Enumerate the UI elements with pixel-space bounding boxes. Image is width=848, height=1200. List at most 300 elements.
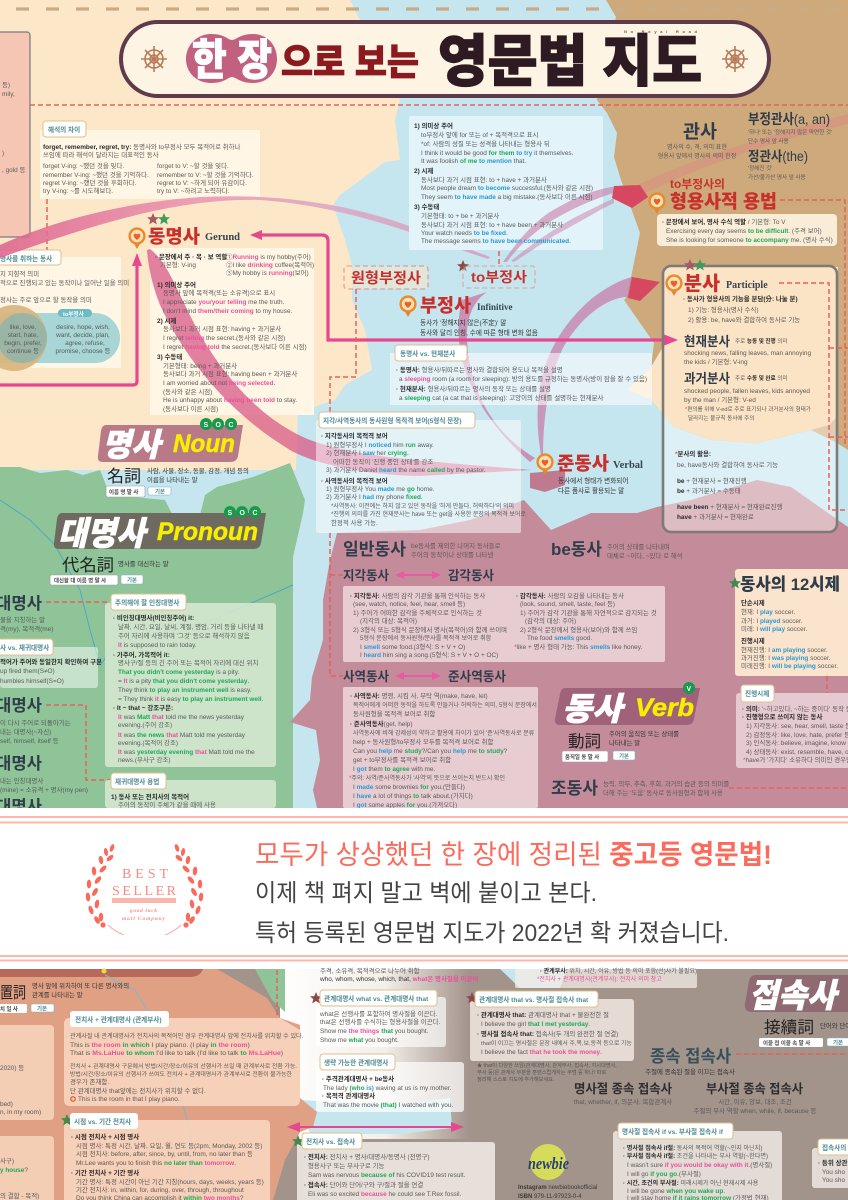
- section: 명사 Noun: Noun: [173, 430, 235, 458]
- panel: 동명사 vs 현재분사: · 동명사: 형용사/뒤따르는 명사와 결합되어 용도나 목적을 설명: [396, 365, 563, 374]
- panel: 지각/사역동사 목적격 보어: 1) 원형부정사 You made me go home.: [326, 484, 435, 493]
- panel: 명사절 접속사 if vs 부사절 접속사 if: I will be gone when you wake up.: [627, 1188, 725, 1195]
- panel: 관계대명사 that vs 명사절 접속사 that: [466, 991, 634, 1061]
- section: 명사 Noun: 이름을 나타내는 말: [147, 475, 198, 484]
- promo line 3: 특허 등록된 영문법 지도가 2022년 확 커졌습니다.: [255, 920, 729, 947]
- arcs: to부정사 to 형용사적 용법: [503, 114, 848, 262]
- section: 동사 Verb: 동사: [562, 691, 626, 727]
- panel: 분사 Participle: be, have동사와 결합하여 동사로 기능: [677, 460, 778, 469]
- section: to부정사의 형용사적 용법: 형용사적 용법: [670, 191, 777, 212]
- panel: 지각동사 감각동사: I heard him sing a song.(5형식: S + V + O + OC): [360, 650, 498, 659]
- tag: 기본: 기본: [833, 1038, 843, 1046]
- panel: 지각/사역동사 목적격 보어: 한정적 사용 가능.: [331, 518, 378, 527]
- panel: 분사 Participle: 주로 수동 및 완료 의미: [735, 374, 788, 382]
- panel: 지각동사 감각동사: · 지각동사: 사람의 감각 기관을 통해 인식하는 동사: [350, 591, 485, 600]
- section: 준동사 Verbal: 다른 품사로 활용되는 말: [558, 486, 624, 495]
- arc: 동명사 to 준동사 sweep: [147, 249, 530, 476]
- map background: lower section: [0, 968, 848, 1200]
- panel: 주의해야 할 인칭대명사: news.(부사구 강조): [118, 755, 171, 764]
- panel: to부정사 text: 동사보다 과거 시점 표현: to + have + 과거분사: [421, 175, 547, 184]
- badge: V: V: [686, 686, 692, 693]
- panel: 관계대명사 that vs 명사절 접속사 that: I believe the girl that I met yesterday.: [481, 1021, 590, 1028]
- panel: 사역동사: I have a lot of things to talk about.(가지다): [353, 791, 473, 800]
- panel: 동명사를 취하는 동사: 지 지향적 의미: [0, 269, 39, 278]
- heading: 준동사: 준동사: [557, 453, 609, 474]
- panel: 주의해야 할 인칭대명사: [105, 594, 276, 767]
- section: 일반동사: be동사를 제외한 나머지 동사들로: [411, 541, 501, 550]
- panel: 해석의 차이: 해석의 차이: [48, 125, 80, 134]
- text block: 대명사 left column: 적어가 주어와 동일한지 확인하여 구분: [0, 657, 102, 666]
- panel: 지각/사역동사 목적격 보어: *사역동사: 이전에는 하지 않고 있던 동작을 '하게 만들다, 허락하다'의 의미: [331, 502, 514, 510]
- panel: 사역동사: *주의: 사역/준사역동사가 '사역'의 뜻으로 쓰이는지 반드시 확인: [349, 774, 505, 782]
- panel: 동명사를 취하는 동사: 정사는 주로 앞으로 할 동작을 의미: [0, 295, 92, 304]
- tag: 이름 명 말 사: 이름 명 말 사: [109, 488, 138, 496]
- heading: 분사: 분사: [684, 273, 720, 295]
- section: 관사: 단수 명사 앞 사용: [748, 137, 789, 145]
- panels: left lower stubs: bed): [0, 1101, 13, 1108]
- panel: 동사의 12시제: 과거진행: I was playing soccer.: [741, 653, 831, 662]
- panel: top clipped 관계부사: [515, 967, 697, 988]
- panel: 동명사를 취하는 동사: 명사를 취하는 동사: [0, 254, 52, 263]
- section: to부정사의 형용사적 용법: Exercising every day seems to be difficult. (주격 보어): [666, 226, 822, 235]
- badge: best seller wreath: good luck: [129, 908, 157, 914]
- panel: 명사절 접속사 if vs 부사절 접속사 if: I will go if you go.(부사절): [627, 1169, 701, 1178]
- section: 관사: '정해진 것': [748, 164, 772, 172]
- venn diagram: [0, 305, 120, 371]
- panel: 재귀대명사 용법: [105, 773, 276, 809]
- panel: to부정사 text: [414, 121, 593, 245]
- panel: 시점 vs 기간 전치사: Mr.Lee wants you to finish this no later than tomorrow.: [76, 1160, 236, 1167]
- section: 부정사 Infinitive: 동사가 '정해지지 않은(不定)' 말: [420, 318, 506, 327]
- section: 준동사 Verbal: 동사에서 형태가 변화되어: [558, 476, 628, 485]
- panel: 분사 Participle: 1) 기능: 형용사(명사 수식): [688, 305, 758, 314]
- section: 명사 Noun: 사람, 사물, 장소, 동물, 감정, 개념 등의: [147, 466, 249, 475]
- icon: ship wheel left: [141, 46, 167, 72]
- white promo band: [0, 808, 848, 969]
- venn diagram: agree, refuse,: [65, 340, 105, 347]
- panel: 해석의 차이: remember V-ing: ~했던 것을 기억하다.: [43, 170, 149, 179]
- panel: to부정사 text: 기본형태: to + be + 과거분사: [421, 211, 499, 220]
- text block: 대명사 left column: up fired them(S≠O): [0, 668, 55, 675]
- section: 대명사 Pronoun: Pronoun: [157, 518, 258, 546]
- panel: 시점 vs 기간 전치사: · 기간 전치사 + 기간 명사: [71, 1168, 139, 1177]
- panel: 해석의 차이: regret to V: ~하게 되어 유감이다.: [157, 178, 247, 187]
- panel: 동명사를 취하는 동사: [0, 250, 129, 371]
- panel: 분사 Participle: [663, 259, 837, 532]
- subtitle: No Royal Road: No Royal Road: [624, 29, 698, 34]
- panel: 동명사 text: I don't mind them/their coming to my house.: [163, 308, 293, 315]
- panel: top clipped 관계부사: *전치사 + 관계대명사(관계부사): 전치사 의미 참고: [537, 975, 662, 983]
- hanja: 置詞: 置詞: [0, 985, 26, 1002]
- panel: to부정사 text: 1) 의미상 주어: [414, 121, 453, 130]
- icon: ship wheel right: [722, 46, 748, 72]
- venn diagram: like, love,: [10, 324, 37, 331]
- icon: warning circle: [71, 1097, 75, 1101]
- heading: 과거분사: 과거분사: [684, 371, 730, 386]
- panel: 지각동사 감각동사: The food smells good.: [527, 635, 592, 642]
- section: 전치사 heading: 관계를 나타내는 말: [32, 990, 83, 999]
- tag: 기본: [121, 575, 143, 584]
- panel: 해석의 차이: [40, 121, 260, 199]
- panel: 전치사 vs 접속사: 형용사구 또는 부사구로 기능: [308, 1161, 385, 1170]
- panel: 사역동사: [343, 687, 538, 809]
- venn diagram: continue 등: [7, 347, 39, 355]
- panel: 전치사 + 관계대명사: That is Ms.LaHue to whom I'd like to talk (I'd like to talk to Ms.LaHue): [70, 1050, 283, 1057]
- panel: 전치사 + 관계대명사: [64, 1011, 304, 1106]
- panel: 명사절 접속사 if vs 부사절 접속사 if: · 부사절 접속사 if절: 조건을 나타내는 부사 역할(~한다면): [623, 1152, 768, 1160]
- badge: best seller wreath: mall Company: [122, 916, 166, 922]
- icon: pin 동명사: [130, 229, 144, 249]
- panel: 동명사 text: ②I like drinking coffee(목적어): [226, 260, 314, 269]
- panel: 해석의 차이: regret V-ing: ~했던 것을 후회하다.: [43, 178, 137, 187]
- panel: 주의해야 할 인칭대명사: 주의해야 할 인칭대명사: [115, 598, 179, 607]
- panel: 동명사 text: I appreciate you/your telling me the truth.: [163, 299, 285, 306]
- hanja: 動詞: 動詞: [568, 732, 601, 751]
- panel: 동명사 text: I regret having told the secret.(동사보다 이른 시점): [163, 342, 307, 351]
- section: 명사 Noun: 명사: [102, 427, 163, 463]
- icon: pin 준동사: [538, 455, 552, 475]
- panel: 동명사 vs 현재분사: [390, 345, 652, 405]
- panel: to부정사 text: The message seems to have been communicated.: [421, 238, 571, 245]
- section: be동사: [551, 540, 683, 560]
- panel: 명사절 접속사 if vs 부사절 접속사 if: · 명사절 접속사 if절: 동사의 목적어 역할(~인지 아닌지): [623, 1144, 762, 1152]
- panel: 전치사 + 관계대명사: 관계사절 내 관계대명사가 전치사의 목적어인 경우 관계대명사 앞에 전치사를 위치할 수 있다.: [70, 1032, 304, 1040]
- panel: 관계대명사 that vs 명사절 접속사 that: I believe the fact that he took the money.: [481, 1049, 602, 1056]
- panel: 시점 vs 기간 전치사: 기간 명사: 특정 시간이 아닌 기간 지칭(hours, days, weeks, years 등): [76, 1177, 264, 1186]
- panel: 주의해야 할 인칭대명사: · 가주어, 가목적어 it:: [113, 650, 170, 659]
- section: 관사: '하나' 또는 '정해지지 않은 막연한 것': [748, 128, 832, 136]
- venn diagram: to부정사: [63, 310, 85, 318]
- panel: 지각동사 감각동사: (감각의 대상: 주어): [525, 616, 576, 625]
- text block: 대명사 left column: 사 vs. 재귀대명사: [0, 643, 49, 652]
- text block: 대명사 left column: humbles himself(S=O): [0, 678, 64, 685]
- badge: 동사 Verb: [555, 688, 700, 725]
- panel: 사역동사: help + 동사원형/to부정사 모두를 목적격 보어로 취함: [353, 737, 494, 746]
- text block: 대명사 left column: 내는 인칭대명사: [0, 776, 43, 785]
- section: 접속사 badge: [745, 975, 848, 1047]
- panel: 관계대명사 that vs 명사절 접속사 that: that이 이끄는 명사절은 문장 내에서 주,목,보,동격 등으로 기능: [481, 1039, 632, 1047]
- panel: 해석의 차이: try to V: ~하려고 노력하다.: [157, 186, 230, 195]
- panel: 전치사 vs 접속사: Sam was nervous because of his COVID19 test result.: [308, 1172, 466, 1179]
- panel: 사역동사: Can you help me study?/Can you help me to study?: [353, 748, 508, 755]
- panel: 동명사 vs 현재분사: a sleeping cat (a cat that is sleeping): 고양이의 상태를 설명하는 현재분사: [399, 393, 603, 402]
- panels: left lower stubs: 의 결합 - 목적): [0, 1191, 39, 1200]
- panel: 동명사 text: 동사보다 과거 시점 표현: having + 과거분사: [163, 324, 281, 333]
- stars: [684, 259, 706, 270]
- panel: 분사 Participle: *분사의 활용:: [675, 449, 711, 458]
- panel: 시점 vs 기간 전치사: 시점 전치사: before, after, since, by, until, from, no later than 등: [76, 1149, 253, 1158]
- panel: 지각동사 감각동사: (look, sound, smell, taste, feel 등): [520, 600, 615, 608]
- map background: upper section: [0, 0, 848, 808]
- panel: 주의해야 할 인칭대명사: It was Matt that told me the news yesterday: [118, 714, 245, 721]
- section: 부정사 Infinitive: 동사와 달리 인칭, 수에 따른 형태 변화 없음: [420, 328, 538, 337]
- tag: 이을 접 이을 속 말 사: 이을 접 이을 속 말 사: [763, 1039, 810, 1047]
- section: 종속 접속사: 시간, 이유, 양보, 대조, 조건: [718, 1097, 792, 1106]
- panel: 지각동사 감각동사: 1) 주어가 어떠한 감각을 주체적으로 인식하는 것: [353, 608, 482, 617]
- panel: 동명사 text: 동명사 앞에 목적격(또는 소유격)으로 표시: [163, 288, 275, 297]
- panel: 지각동사 감각동사: (see, watch, notice, feel, hear, smell 등): [353, 600, 465, 608]
- panel: 분사 Participle: be + 현재분사 = 현재진행: [677, 476, 747, 485]
- promo headline: 모두가 상상했던 한 장에 정리된 중고등 영문법!: [255, 840, 772, 870]
- panel: 해석의 차이: forget, remember, regret, try: 동명사와 to부정사 모두 목적어로 취하나: [43, 142, 241, 151]
- panel: 재귀대명사 용법: 재귀대명사 용법: [115, 777, 159, 786]
- heading row: 사역동사 준사역동사: 사역동사: [343, 669, 389, 684]
- panel: 생략 가능한 관계대명사: That was the movie (that) I watched with you.: [323, 1102, 453, 1109]
- panel: 지각동사 감각동사: 2) 3형식 또는 5형식 문장에서 명사(목적어)와 함께 쓰이며: [353, 625, 507, 634]
- callout: 원형부정사: [344, 266, 428, 289]
- panel: 관계대명사 that vs 명사절 접속사 that: · 관계대명사 that: 관계대명사 that + 불완전한 절: [477, 1010, 609, 1019]
- section: 종속 접속사: 종속 접속사: [650, 1047, 732, 1066]
- panel: 동명사 text: 3) 수동태: [157, 352, 182, 361]
- section: 일반동사: 주어의 동작이나 상태를 나타낸: [411, 550, 493, 559]
- panel: left top pink: ): [2, 150, 4, 157]
- panel: 지각/사역동사 목적격 보어: 1) 원형부정사 I noticed him run away.: [326, 440, 434, 449]
- panel: to부정사 text: They seem to have made a big mistake.(동사보다 이른 시점): [421, 192, 593, 201]
- icon: pin 분사: [667, 276, 681, 296]
- panel: 전치사 + 관계대명사: 전치사 + 관계대명사 구문에서 방법/시간/장소/이유의 선행사가 쓰일 때 관계부사로 전환 가능.: [70, 1062, 297, 1070]
- panels: left lower stubs: [0, 1025, 54, 1200]
- heading: 부정사: 부정사: [420, 295, 471, 316]
- panel: 분사 Participle: 2) 활용: be, have와 결합하여 동사로 기능: [688, 315, 800, 324]
- panel: 동명사 text: · 문장에서 주 · 목 · 보 역할: [155, 252, 227, 261]
- heading: 현재분사: 현재분사: [684, 334, 730, 349]
- panel: 생략 가능한 관계대명사: [316, 1054, 464, 1112]
- panel: 생략 가능한 관계대명사: · 목적격 관계대명사: [322, 1091, 375, 1100]
- text block: 관계대명사 top: 주격, 소유격, 목적격으로 나누어 취함: [320, 966, 420, 975]
- section: 명사 Noun: [98, 418, 249, 497]
- hanja: 代名詞: 代名詞: [62, 556, 114, 575]
- panel: 접속사의 right stub: You sho: [822, 1177, 845, 1184]
- arrow: pink connector 분사 to 동명사: [250, 230, 678, 346]
- tag: 기본: [613, 751, 635, 760]
- badge: best seller wreath: BEST: [122, 867, 168, 882]
- section: 종속 접속사: that, whether, if, 의문사, 복합관계사: [574, 1097, 672, 1106]
- venn diagram: promise, choose 등: [56, 347, 111, 355]
- arc: 준동사 to 부정사: [458, 292, 535, 462]
- panel: 분사 Participle: *편의를 위해 V-ed로 주로 표기되나 과거분사의 형태가: [685, 405, 811, 413]
- tag: 기본: [148, 487, 171, 496]
- panel: 관계대명사 that vs 명사절 접속사 that: 관계대명사 that vs. 명사절 접속사 that: [479, 995, 589, 1004]
- panel: 해석의 차이: try V-ing: ~를 시도해보다.: [43, 186, 113, 195]
- panel: left top pink: 등): [2, 81, 10, 89]
- title: 영문법 지도: 영문법 지도: [438, 30, 702, 93]
- section: 관사: 가산/불가산 명사 앞 사용: [748, 173, 806, 181]
- panels: left lower stubs: y house?: [0, 1167, 28, 1174]
- section: 종속 접속사: 주절에 종속된 절을 이끄는 접속사: [645, 1067, 735, 1076]
- panel: left top pink: , gold 등: [2, 166, 26, 174]
- panel: 진행시제: 진행시제: [745, 689, 769, 698]
- panel: to부정사 box background: [409, 116, 603, 250]
- section: 일반동사: [343, 540, 501, 559]
- section: 종속 접속사: 부사절 종속 접속사: [706, 1082, 803, 1096]
- panel: 주의해야 할 인칭대명사: evening.(목적어 강조): [118, 738, 178, 747]
- panel: 관계대명사 what vs: Show me what you bought.: [320, 1037, 399, 1044]
- panel: 해석의 차이: remember to V: ~할 것을 기억하다.: [157, 170, 254, 179]
- dashed top border: [16, 7, 848, 11]
- venn diagram: desire, hope, wish,: [56, 324, 110, 331]
- section: 접속사 badge: 접속사: [749, 977, 839, 1014]
- section: 종속 접속사: 주절의 부사 역할 when, while, if, because 등: [694, 1106, 817, 1115]
- logo: newbie: [518, 1144, 597, 1200]
- tag: 움직일 동 말 사: [562, 751, 608, 762]
- panel: 지각동사 감각동사: 5형식 문장에서 동사원형/분사를 목적격 보어로 취함: [360, 634, 492, 642]
- section: 전치사 heading: [0, 981, 129, 1013]
- section: to부정사의 형용사적 용법: · 문장에서 보어, 명사 수식 역할 / 기본형: To V: [662, 217, 786, 226]
- section: 종속 접속사: 명사절 종속 접속사: [574, 1082, 672, 1096]
- section: be동사: 주어의 상태를 나타내며: [607, 542, 670, 551]
- panel: 동사의 12시제: 진행시제: [741, 636, 765, 645]
- panel: 진행시제: [736, 685, 848, 768]
- panel: 분사 Participle: the kids / 기본형: V-ing: [684, 357, 748, 366]
- panel: 동명사 vs 현재분사: a sleeping room (a room for sleeping): 방의 용도를 규정하는 동명사(방이 잠을 잘 수 있음): [399, 374, 647, 383]
- panel: 사역동사: get + to부정사를 목적격 보어로 취함: [353, 755, 451, 764]
- panel: 분사 Participle: have + 과거분사 = 현재완료: [677, 512, 754, 521]
- text block: 관계대명사 top: [319, 966, 478, 983]
- callout: to부정사: to부정사: [471, 269, 527, 285]
- panel: 시점 vs 기간 전치사: [61, 1113, 270, 1200]
- panel: 주의해야 할 인칭대명사: 날짜, 시간, 요일, 날씨, 계절, 명암, 거리 등을 나타낼 때: [118, 622, 263, 631]
- panel: 사역동사: 사역동사에 비해 강제성이 약하고 활용에 차이가 있어 '준'사역동사로 분류: [353, 729, 535, 737]
- arrow: double pink: [395, 672, 441, 680]
- panel: 주의해야 할 인칭대명사: 주어 자리에 사용하며 '그것' 등으로 해석하지 않음: [118, 631, 250, 640]
- heading row: 사역동사 준사역동사: 준사역동사: [448, 669, 506, 684]
- panel: 동명사 text: ③My hobby is running(보어): [226, 268, 309, 277]
- section: be동사: be동사: [551, 540, 602, 559]
- title: 으로 보는: 으로 보는: [281, 42, 419, 83]
- panel: 동명사 text: (동사와 같은 시점): [163, 387, 212, 396]
- panel: 주의해야 할 인칭대명사: It is supposed to rain today.: [118, 642, 197, 649]
- panel: 동사의 12시제: 현재진행: I am playing soccer.: [741, 645, 828, 654]
- heading: Verbal: Verbal: [613, 460, 643, 471]
- text block: 대명사 left column: 물을 지칭하는 말: [0, 615, 45, 624]
- panel: to부정사 text: 동사보다 과거 시점 표현: to + have been + 과거분사: [421, 220, 563, 229]
- section: 대명사 Pronoun: 명사를 대신하는 말: [118, 559, 169, 568]
- panel: 분사 Participle: by the man / 기본형: V-ed: [684, 395, 756, 404]
- logo: newbie: ISBN 979-11-97923-0-4: [518, 1194, 582, 1200]
- panel: 전치사 + 관계대명사: This is the room in which I play piano. (I play in the room): [70, 1042, 250, 1049]
- badge: SOC: C: [252, 510, 258, 517]
- panel: 동명사 text: 기본형태: being + 과거분사: [163, 361, 237, 370]
- tag: 움직일 동 말 사: 움직일 동 말 사: [565, 753, 599, 761]
- panel: 시점 vs 기간 전치사: 시점 vs. 기간 전치사: [74, 1117, 131, 1126]
- text block: 대명사 left column: 격(my), 목적격(me): [0, 625, 53, 633]
- panel: 재귀대명사 용법: 주어의 동작이 주체가 같을 때에 사용: [118, 800, 216, 809]
- panel: 관계대명사 what vs: 관계대명사 what vs. 관계대명사 that: [324, 994, 429, 1003]
- tag: 기본: 기본: [127, 576, 137, 584]
- panel: 동명사 text: 기본형: V-ing: [160, 260, 196, 269]
- panel: 주의해야 할 인칭대명사: They think to play an instrument well is easy.: [118, 687, 252, 694]
- badge: V: [683, 682, 695, 694]
- panel: 사역동사: · 준사역동사(get, help): [350, 719, 413, 728]
- panel: 지각동사 감각동사: 2) 2형식 문장에서 형용사(보어)와 함께 쓰임: [520, 625, 637, 634]
- arrow: double pink 전치사 접속사: [287, 1122, 464, 1132]
- section: to부정사의 형용사적 용법: She is looking for someone to accompany me. (명사 수식): [666, 235, 833, 244]
- panel: 지각/사역동사 목적격 보어: *진행의 의미를 가진 현재분사는 have 또는 get을 사용한 문장의 목적격 보어로: [331, 510, 526, 518]
- panel: 지각동사 감각동사: (지각의 대상: 목적어): [360, 616, 417, 625]
- icon: pin 부정사: [401, 297, 415, 317]
- panel: 동명사 text: He is unhappy about having been told to stay.: [163, 397, 297, 404]
- section: 조동사: 더해 주는 '도움' 동사로 동사원형과 함께 사용: [603, 788, 723, 797]
- panel: 사역동사: · 사역동사: 명령, 시킴 사, 부탁 역(make, have, let): [350, 691, 488, 700]
- panel: 지각동사 감각동사: *like + 명사 형태 가능: This smells like honey.: [514, 642, 643, 651]
- panel: left top pink: mily,: [2, 91, 15, 98]
- text block: 대명사 left column: self, himself, itself 등: [0, 737, 59, 745]
- section: 대명사 Pronoun: [50, 506, 266, 585]
- panel: 주의해야 할 인칭대명사: It was yesterday evening that Matt told me the: [118, 749, 255, 756]
- panel: 분사 Participle: 주로 능동 및 진행 의미: [735, 337, 788, 345]
- section: to부정사의 형용사적 용법: [650, 177, 837, 246]
- section: to부정사의 형용사적 용법: to부정사의: [670, 177, 725, 191]
- panel: 동명사 text: I regret telling the secret.(동사와 같은 시점): [163, 333, 285, 342]
- panel: 해석의 차이: forget to V: ~할 것을 잊다.: [157, 161, 229, 170]
- panel: left top pink: [0, 32, 30, 237]
- text block: 대명사 left column: 이 다시 주어로 되돌아가는: [0, 718, 71, 727]
- panel: 명사절 접속사 if vs 부사절 접속사 if: · 시간, 조건의 부사절: 미래시제가 아닌 현재시제 사용: [623, 1179, 759, 1187]
- panel: 관계대명사 what vs: what은 선행사를 포함하여 명사절을 이끈다.: [319, 1009, 438, 1018]
- panel: 주의해야 할 인칭대명사: = They think it is easy to play an instrument well.: [118, 696, 264, 703]
- text block: note: ★ that이 다양한 쓰임(관계대명사, 관계부사, 접속사, 지시대명사,: [477, 1061, 617, 1069]
- callout: 원형부정사: 원형부정사: [351, 270, 422, 287]
- stars: [147, 213, 170, 224]
- tag: 이름 명 말 사: [106, 486, 145, 497]
- panel: 지각/사역동사 목적격 보어: [316, 412, 526, 533]
- text block: note: 정리해 스스로 지도에 추가해보세요.: [477, 1075, 554, 1083]
- section: 일반동사: 일반동사: [343, 540, 406, 559]
- panel: 지각/사역동사 목적격 보어: · 지각동사의 목적격 보어: [321, 431, 388, 440]
- panel: 명사절 접속사 if vs 부사절 접속사 if: [613, 1123, 782, 1200]
- panel: 동명사 box background: [150, 248, 314, 415]
- panels: left lower stubs: n, in my room): [0, 1109, 41, 1116]
- tag: 대신할 대 이름 명 말 사: [50, 575, 118, 585]
- panel: 분사 Participle: have been + 현재분사 = 현재완료진행: [677, 502, 782, 511]
- panel: 해석의 차이: 쓰임에 따라 해석이 달라지는 대표적인 동사: [43, 150, 159, 159]
- heading: 동사의 12시제: 동사의 12시제: [740, 575, 840, 594]
- panel: 주의해야 할 인칭대명사: It was the news that Matt told me yesterday: [118, 732, 246, 739]
- panel: 지각/사역동사 목적격 보어: 3) 과거분사 Daniel heard the name called by the pastor.: [326, 465, 486, 474]
- panel: 전치사 + 관계대명사: This is the room in that I play piano.: [78, 1096, 180, 1103]
- panel: 분사 Participle: shocked people, fallen leaves, kids annoyed: [684, 388, 810, 395]
- panel: 전치사 + 관계대명사: 방법/시간/장소/이유의 선행사가 쓰여도 전치사 + 관계대명사가 관계부사로 전환이 불가능한: [70, 1070, 293, 1078]
- icon: pin 형용사적: [650, 194, 664, 214]
- text block: 대명사 left column: [0, 594, 102, 816]
- badge: SOC: O: [240, 510, 246, 517]
- panel: 동사의 12시제: 단순시제: [741, 598, 765, 607]
- badge: SOC: S: [204, 422, 208, 429]
- panel: 지각/사역동사 목적격 보어: 2) 현재분사 I saw her crying.: [326, 448, 409, 457]
- panel: 지각/사역동사 목적격 보어: 지각/사역동사의 동사원형 목적격 보어(5형식 문장): [323, 416, 462, 425]
- panel: 지각동사 감각동사: [343, 586, 665, 662]
- panel: 관계대명사 what vs: [310, 990, 446, 1047]
- panels: left lower stubs: 사구): [0, 1156, 14, 1165]
- panel: 분사 Participle: shocking news, falling leaves, man annoying: [684, 350, 811, 357]
- heading: Gerund: Gerund: [205, 232, 240, 243]
- panel: 동명사 text: 1) 의미상 주어: [157, 280, 196, 289]
- panel: 동명사 text: I am worried about not being selected.: [163, 380, 276, 387]
- panel: 관계대명사 what vs: Show me the things that you bought.: [320, 1028, 429, 1035]
- panel: 주의해야 할 인칭대명사: That you didn't come yesterday is a pity.: [118, 669, 239, 676]
- panel: 동명사 vs 현재분사: · 현재분사: 형용사/뒤따르는 명사의 동작 또는 상태를 설명: [396, 384, 551, 393]
- section: 전치사 heading: 명사 앞에 위치하여 또 다른 명사와의: [32, 981, 129, 990]
- panel: 접속사의 right stub: You sho: [822, 1169, 845, 1176]
- text block: 관계대명사 top: who, whom, whose, which, that, what은 명사절을 이끌어: [319, 974, 478, 983]
- panel: 관계대명사 that vs 명사절 접속사 that: · 명사절 접속사 that: 접속사(두 개의 완전한 절 연결): [477, 1029, 618, 1038]
- heading: 동명사: 동명사: [148, 226, 200, 247]
- heading: 정관사: 정관사(the): [748, 149, 808, 164]
- panel: 동명사 text: 동사보다 과거 시점 표현: having been + 과거분사: [163, 369, 297, 378]
- badge: best seller wreath: [85, 844, 204, 935]
- panel: 전치사 + 관계대명사: 단 관계대명사 that앞에는 전치사가 위치할 수 없다.: [70, 1086, 206, 1095]
- panel: 지각동사 감각동사: · 감각동사: 사람의 오감을 나타내는 동사: [516, 591, 624, 600]
